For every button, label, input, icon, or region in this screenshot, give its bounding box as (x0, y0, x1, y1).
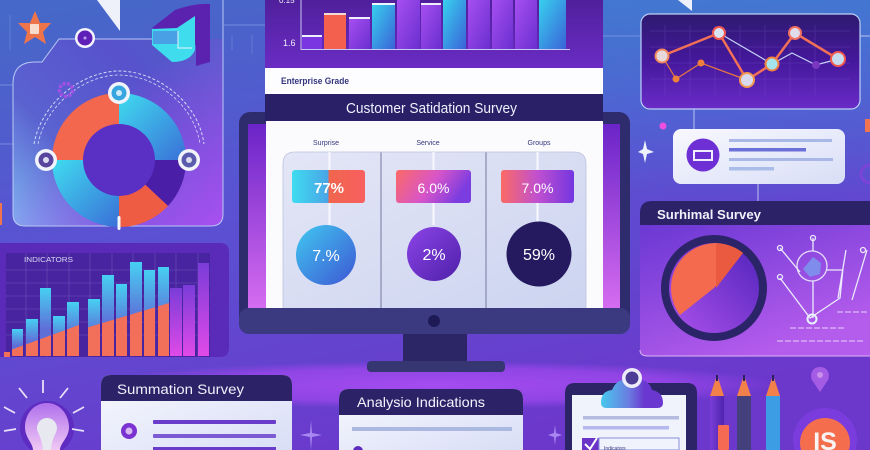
panel: line chart (641, 14, 860, 109)
metric circle 3 (506, 222, 572, 286)
metric circle 1: 7.% (312, 248, 340, 265)
text lines (729, 139, 833, 170)
icon: sparkle (638, 140, 654, 163)
axis strip (777, 312, 868, 341)
monitor camera (428, 315, 440, 327)
text lines (153, 420, 276, 450)
panel: results table (283, 152, 586, 308)
icon: pencil 1 (710, 375, 724, 450)
metric pill 1: 77% (314, 180, 344, 197)
connectors (694, 36, 870, 201)
panel: clipboard (565, 368, 697, 450)
monitor stand (367, 334, 505, 372)
network diagram (778, 236, 867, 324)
orange tag left (0, 203, 2, 225)
decoration: white triangle (97, 0, 120, 31)
icon: star badge (18, 11, 51, 44)
secondary lines (662, 33, 838, 82)
axis label: 1.6 (283, 38, 296, 48)
pie chart (665, 239, 763, 337)
orange overlay area (4, 303, 169, 357)
sparkle accent right (548, 425, 562, 445)
metric pill 3 (501, 170, 574, 203)
panel: summation survey (101, 375, 292, 450)
dot accent (660, 122, 666, 130)
panel: survey sheet (265, 68, 603, 308)
bullet (353, 446, 363, 450)
main line (662, 33, 838, 80)
white band: heading: Enterprise Grade (281, 76, 349, 86)
clip (601, 368, 663, 408)
bars (302, 0, 566, 50)
clipboard lines (583, 416, 679, 430)
panel: monitor (239, 112, 630, 372)
icon: map pin (811, 367, 829, 392)
metric circle 2: 2% (422, 247, 446, 264)
heading: Surhimal Survey (657, 207, 762, 222)
icon: lightbulb (4, 380, 84, 450)
panel: summary survey (640, 201, 870, 356)
panel: info card (673, 129, 845, 184)
column labels: Surprise (313, 140, 339, 147)
metric circle 1 (296, 225, 356, 285)
white band: heading (265, 68, 603, 94)
heading: Analysio Indications (357, 394, 485, 410)
metric circle 2 (407, 227, 461, 281)
icon: pencil 3 (766, 375, 780, 450)
title: Customer Satisfaction Survey (265, 94, 603, 121)
dashed arc (34, 71, 204, 144)
heading: Summation Survey (117, 382, 244, 397)
panel: donut chart card (13, 0, 223, 230)
line nodes (656, 27, 845, 87)
icon: gear (60, 84, 72, 96)
heading (101, 375, 292, 401)
ring accent (861, 165, 870, 183)
metric pill 3: 7.0% (522, 180, 553, 196)
column labels: Service (416, 140, 440, 147)
panel: top bar chart (265, 0, 603, 68)
heading (339, 389, 523, 415)
icon: pencil 2 (737, 375, 751, 450)
panel: bottom-left bar chart (0, 243, 229, 357)
icon: eraser tag (718, 425, 729, 450)
orange tag (865, 119, 870, 132)
icon: target (121, 423, 137, 439)
text line (352, 427, 512, 431)
donut nodes (35, 82, 200, 230)
chart label: INDICATORS (24, 257, 73, 264)
panel: analysis indicators (339, 389, 523, 450)
metric pill 2: 6.0% (418, 180, 449, 196)
column labels (313, 140, 551, 147)
connector node (75, 28, 95, 48)
column labels: Groups (528, 140, 551, 147)
decoration: small triangle (678, 0, 692, 11)
title: Customer Satisfaction Survey: Customer Satidation Survey (346, 101, 518, 117)
sparkle accent (300, 420, 322, 450)
donut sectors (52, 93, 186, 227)
icon: IS badge (793, 408, 857, 450)
bars (12, 262, 209, 356)
metric circle 3: 59% (523, 247, 555, 264)
icon: shopping cart (152, 4, 210, 66)
heading (640, 201, 870, 225)
metric pill 1 (292, 170, 365, 203)
icon: card (686, 138, 720, 172)
metric pill 2 (396, 170, 471, 203)
